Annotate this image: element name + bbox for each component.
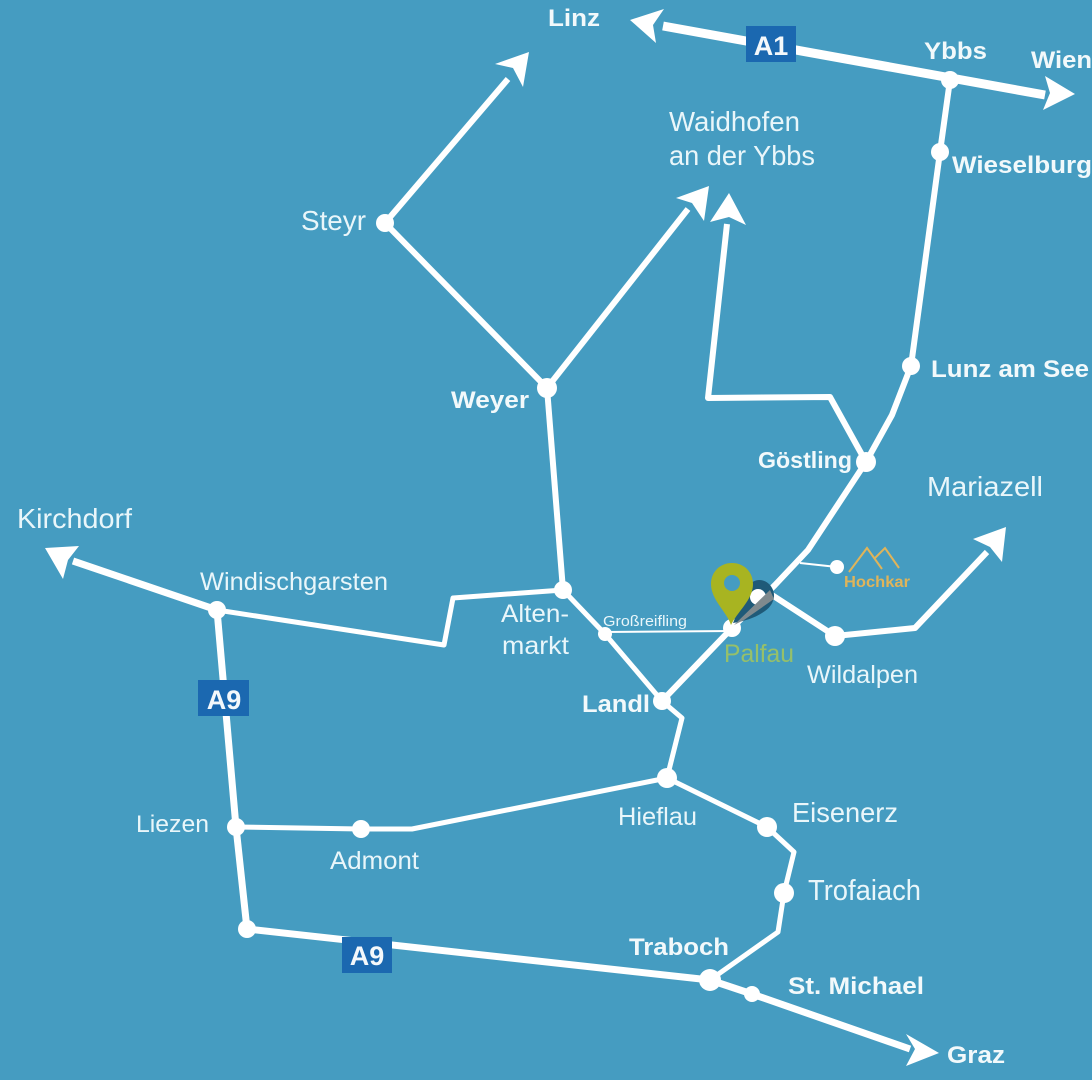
icon: Hochkar mountains — [849, 548, 899, 572]
road: A9 motorway — [217, 610, 910, 1049]
label: Traboch: Traboch — [629, 934, 729, 961]
icon: pin inner hole — [724, 575, 740, 591]
shield: A9 south — [342, 937, 392, 973]
arrow: Steyr to Linz — [495, 52, 529, 87]
arrow: Kirchdorf — [45, 546, 79, 579]
label: Admont: Admont — [330, 847, 419, 875]
road: Altenmarkt via Weyer to Steyr — [385, 223, 563, 590]
label: Trofaiach: Trofaiach — [808, 875, 921, 907]
label: Altenmarkt: Alten- — [501, 600, 569, 628]
shield: A9 west: A9 — [207, 685, 241, 715]
label: Hieflau: Hieflau — [618, 803, 697, 831]
label: Waidhofen an der Ybbs: Waidhofen — [669, 106, 800, 137]
label: Wieselburg: Wieselburg — [952, 152, 1092, 179]
icon: green location pin — [711, 563, 753, 625]
road: Hieflau to Traboch — [667, 778, 794, 980]
shield: A1 — [746, 26, 796, 62]
road: Großreifling link — [605, 631, 732, 632]
shield: A1: A1 — [754, 31, 788, 61]
label: Göstling: Göstling — [758, 447, 852, 473]
arrow: Göstling to Waidhofen — [710, 193, 746, 225]
label: Hochkar: Hochkar — [844, 574, 910, 591]
label: Mariazell: Mariazell — [927, 471, 1043, 502]
arrow: Graz — [906, 1034, 939, 1066]
label: Windischgarsten: Windischgarsten — [200, 568, 388, 596]
road: A1 motorway — [663, 26, 1045, 95]
label: Palfau: Palfau — [724, 640, 794, 668]
arrow: Mariazell — [973, 527, 1006, 562]
road: Liezen to Hieflau — [236, 778, 667, 829]
label: Eisenerz: Eisenerz — [792, 797, 898, 828]
arrow: Wien — [1043, 76, 1075, 110]
icon: shadow pin hole — [750, 589, 766, 605]
label: Steyr: Steyr — [301, 205, 366, 236]
label: Weyer: Weyer — [451, 387, 529, 414]
road: Palfau to Mariazell — [772, 552, 987, 636]
label: Wien: Wien — [1031, 47, 1092, 74]
road: Steyr to Linz — [385, 79, 508, 223]
label: Lunz am See: Lunz am See — [931, 356, 1089, 383]
label: Linz: Linz — [548, 5, 600, 32]
road: Weyer to Waidhofen — [547, 209, 688, 388]
road: Windischgarsten to Kirchdorf — [73, 561, 217, 610]
shield: A9 south: A9 — [350, 941, 384, 971]
label: Waidhofen an der Ybbs: an der Ybbs — [669, 140, 815, 171]
road: Göstling to Waidhofen — [708, 224, 866, 462]
road: Altenmarkt to Landl and Hieflau — [563, 590, 682, 778]
label: St. Michael: St. Michael — [788, 973, 924, 1000]
label: Kirchdorf: Kirchdorf — [17, 503, 132, 534]
road: Altenmarkt to Windischgarsten — [217, 590, 563, 645]
icon: shadow pin grey edge — [734, 590, 774, 625]
road: Hochkar spur — [800, 563, 837, 567]
icon: dark location pin shadow — [733, 580, 774, 623]
junction dots — [208, 71, 959, 1002]
label: Ybbs: Ybbs — [924, 38, 987, 65]
arrow: Linz — [630, 9, 664, 43]
label: Wildalpen: Wildalpen — [807, 661, 918, 689]
label: Graz: Graz — [947, 1042, 1005, 1069]
shield: A9 west — [198, 680, 249, 716]
label: Liezen: Liezen — [136, 811, 209, 838]
label: Landl: Landl — [582, 691, 650, 718]
label: Großreifling: Großreifling — [603, 613, 687, 630]
label: Altenmarkt: markt — [502, 632, 569, 660]
motorway shields — [198, 26, 796, 973]
arrow: Weyer to Waidhofen — [676, 186, 709, 221]
road: Ybbs to Palfau — [662, 80, 950, 701]
